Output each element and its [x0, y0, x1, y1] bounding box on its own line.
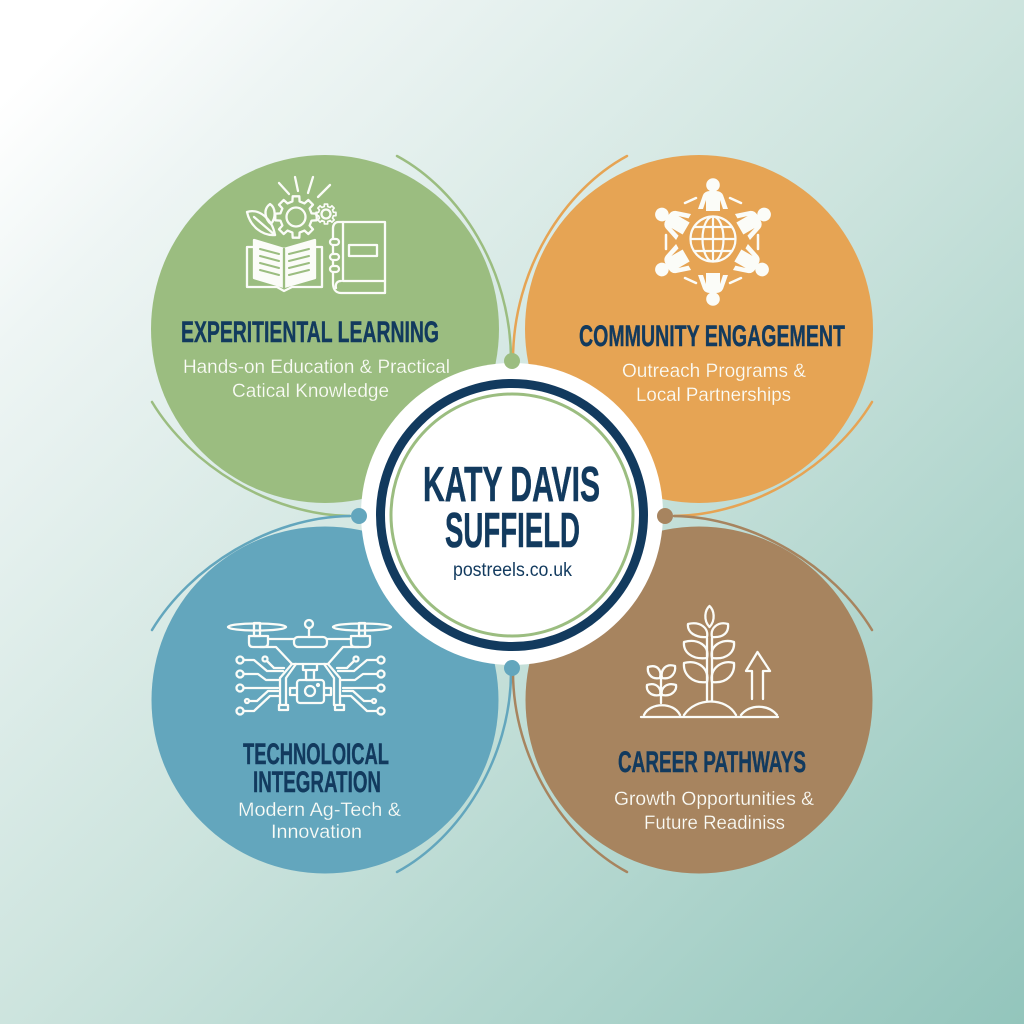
panel: experiential learning — [151, 155, 511, 516]
panel: community engagement — [513, 155, 873, 516]
description: Future Readiniss — [644, 813, 785, 834]
center name — [423, 458, 600, 558]
description: Modern Ag-Tech & — [238, 800, 401, 821]
connector dot: teal — [504, 660, 520, 676]
orange arcs — [513, 156, 872, 516]
panel: technological integration — [152, 516, 511, 874]
description — [622, 361, 806, 406]
heading: TECHNOLOICAL — [243, 738, 389, 771]
description: Local Partnerships — [636, 385, 791, 406]
center name: KATY DAVIS — [423, 458, 600, 512]
brown arcs — [513, 516, 872, 872]
connector dot: green — [504, 353, 520, 369]
panel: career pathways — [513, 516, 872, 874]
central badge — [361, 363, 663, 665]
description — [238, 800, 401, 843]
green arcs — [152, 156, 511, 516]
connector dot: blue — [351, 508, 367, 524]
heading: CAREER PATHWAYS — [618, 746, 806, 779]
brown circle — [526, 526, 872, 874]
icon: drone with circuit lines — [228, 620, 391, 714]
description: Outreach Programs & — [622, 361, 806, 382]
website: postreels.co.uk — [453, 560, 572, 581]
blue arcs — [152, 516, 511, 872]
description: Innovation — [271, 822, 362, 843]
icon: people around a globe — [649, 178, 777, 306]
description: Catical Knowledge — [232, 381, 389, 402]
icon: book, gears and notebook — [247, 177, 385, 293]
heading — [243, 738, 389, 799]
description — [183, 357, 450, 402]
description — [614, 789, 814, 834]
blue circle — [152, 526, 498, 874]
green circle — [151, 155, 499, 503]
description: Growth Opportunities & — [614, 789, 814, 810]
connector dot: brown — [657, 508, 673, 524]
center name: SUFFIELD — [445, 504, 580, 558]
navy ring — [380, 384, 644, 646]
heading: EXPERITIENTAL LEARNING — [181, 316, 439, 349]
description: Hands-on Education & Practical — [183, 357, 450, 378]
green ring — [391, 394, 633, 636]
icon: growing plants and arrow — [641, 606, 778, 717]
orange circle — [525, 155, 873, 503]
heading: COMMUNITY ENGAGEMENT — [579, 320, 845, 353]
heading: INTEGRATION — [253, 766, 381, 799]
white disc — [361, 363, 663, 665]
